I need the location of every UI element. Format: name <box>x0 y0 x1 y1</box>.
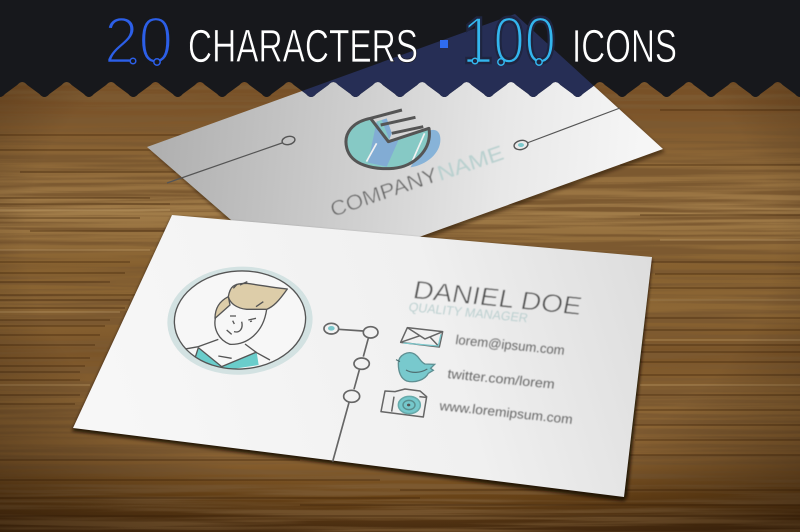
back card shadow <box>150 16 665 284</box>
banner number: 100: 100 <box>462 3 556 77</box>
banner separator square <box>440 40 448 48</box>
banner label: icons: ICONS <box>572 20 677 72</box>
back business card <box>147 14 665 284</box>
icon: envelope <box>401 328 443 347</box>
banner number: 20: 20 <box>104 3 173 77</box>
company name: NAME <box>434 140 506 186</box>
banner label: characters: CHARACTERS <box>188 20 418 72</box>
front business card <box>72 215 652 501</box>
portrait <box>165 263 315 378</box>
header banner <box>0 0 800 97</box>
icon: camera <box>381 389 427 417</box>
contact details: www.loremipsum.com <box>438 398 574 427</box>
portrait ring <box>165 263 315 378</box>
company name <box>327 140 506 222</box>
back card right connector line <box>513 108 620 151</box>
back card left connector line <box>167 135 296 183</box>
front card shadow <box>72 217 652 501</box>
contact details: twitter.com/lorem <box>447 366 556 392</box>
contact icons <box>381 328 443 417</box>
timeline connector <box>324 323 378 462</box>
portrait outline <box>172 268 308 372</box>
company logo <box>346 110 440 169</box>
banner background <box>0 0 800 97</box>
banner card tint <box>302 14 594 97</box>
icon: bird <box>396 353 435 382</box>
contact details: lorem@ipsum.com <box>455 332 566 358</box>
name and job title: DANIEL DOE <box>411 276 584 321</box>
company name: COMPANY <box>327 162 440 222</box>
portrait circle <box>172 268 308 372</box>
name and job title: QUALITY MANAGER <box>407 300 529 325</box>
back card face <box>147 14 663 280</box>
front card face <box>73 215 652 497</box>
contact details <box>438 332 574 427</box>
character drawing <box>183 282 287 371</box>
